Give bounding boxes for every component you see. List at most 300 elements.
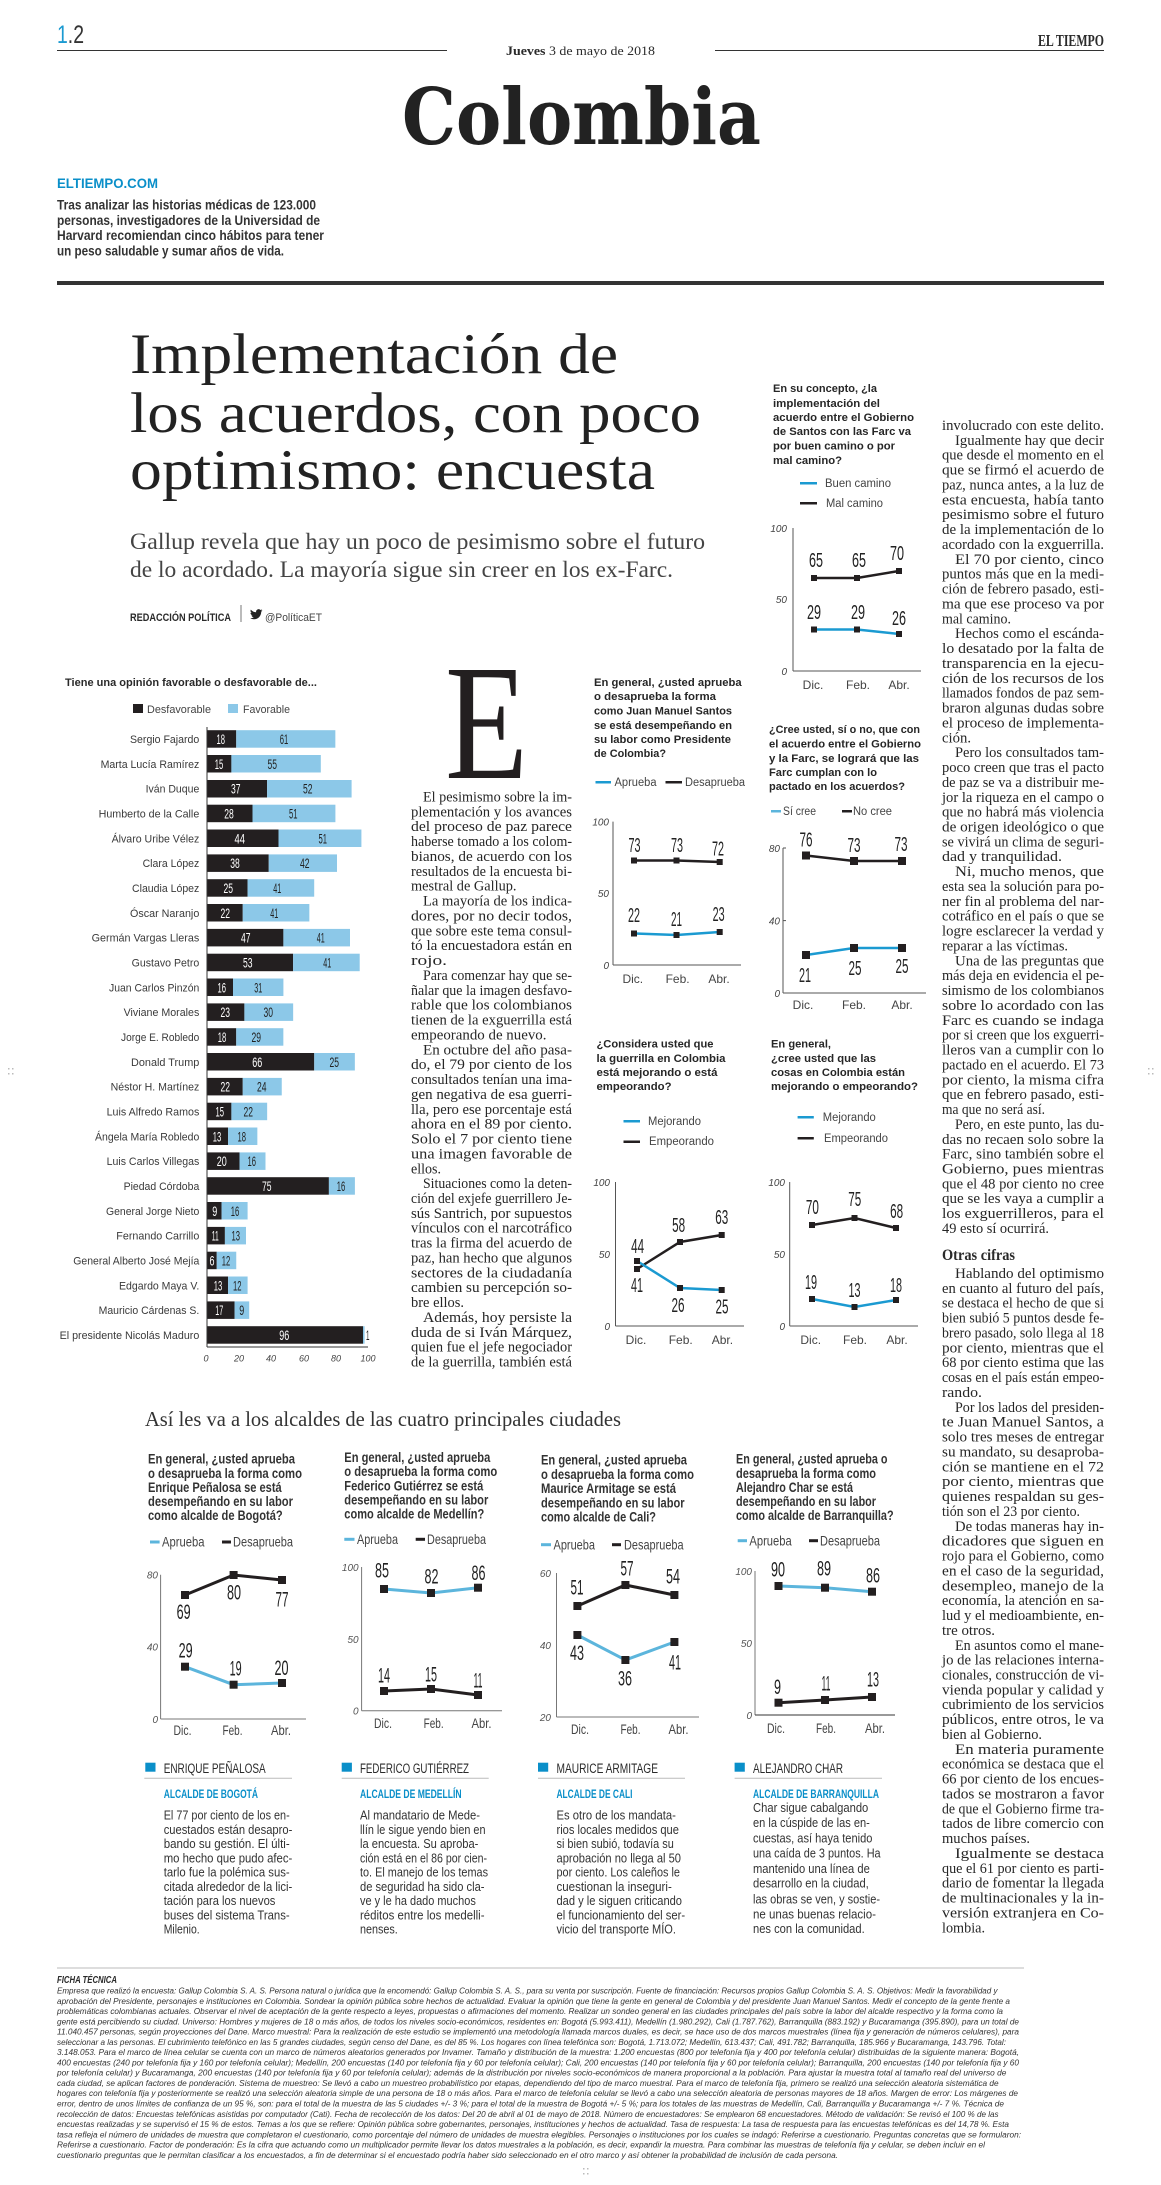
body text: right column: dicadores que siguen en — [942, 1534, 1105, 1550]
masthead: EL TIEMPO: EL TIEMPO — [1038, 31, 1104, 50]
profile: Alejandro Char: ALEJANDRO CHAR — [753, 1761, 843, 1776]
question: mal camino? — [773, 455, 842, 467]
body text: right column: que se les vaya a cumplir a — [942, 1191, 1104, 1207]
body text: right column: jor la riqueza en el campo o — [941, 790, 1104, 806]
data labels: 86 — [472, 1562, 486, 1585]
technical sheet: ficha técnica: problemáticas colombianas actuales. Observar el nivel de aceptación de la gente respecto a leyes, propuestas o afirmaciones del momento. Realizar un sondeo general en las ciudades principales del país sobre la labor del alcalde respectivo y la forma como la — [56, 2006, 1003, 2016]
bar value labels: 66 — [252, 1054, 262, 1070]
bar name labels: Ángela María Robledo — [95, 1130, 199, 1143]
axes: 80 — [147, 1571, 158, 1582]
bar value labels: 18 — [216, 731, 225, 747]
axes: Dic. — [793, 998, 813, 1012]
body text: right column: Igualmente hay que decir — [955, 433, 1104, 449]
bar value labels: 75 — [262, 1178, 272, 1194]
body text: right column: De todas maneras hay in- — [955, 1519, 1104, 1535]
axes: 100 — [768, 1178, 785, 1189]
question: desaprueba la forma como — [736, 1466, 876, 1481]
body text: right column: mal camino. — [942, 611, 1011, 627]
axes: 100 — [592, 818, 609, 829]
main headline — [130, 323, 701, 502]
question: como Juan Manuel Santos — [594, 706, 732, 718]
bar value labels: 41 — [273, 880, 281, 896]
legend — [541, 1536, 684, 1552]
body text: main column: del proceso de paz parece — [411, 819, 572, 835]
legend: Desaprueba — [820, 1532, 880, 1548]
bar value labels: 20 — [217, 1153, 227, 1169]
axes: 0 — [774, 989, 780, 1000]
body text: right column: lombia. — [942, 1920, 985, 1936]
axes: 100 — [735, 1567, 752, 1578]
body text: right column: de paz se va a distribuir me- — [942, 775, 1104, 791]
profile: Maurice Armitage: ALCALDE DE CALI — [556, 1789, 632, 1801]
data labels: 26 — [892, 608, 906, 630]
body text: right column: que el 61 por ciento es parti- — [942, 1861, 1104, 1877]
body text: right column: en cuanto al futuro del país, — [942, 1281, 1104, 1297]
body text: right column: muchos países. — [942, 1831, 1030, 1847]
profile: Alejandro Char: cuestas, así haya tenido — [753, 1831, 872, 1845]
body text: main column: paz, han hecho que algunos — [411, 1250, 572, 1266]
question: de Colombia? — [594, 748, 666, 760]
legend: Aprueba — [162, 1534, 205, 1550]
bar value labels: 53 — [243, 954, 253, 970]
body text: right column: rando. — [942, 1385, 982, 1401]
profile: Federico Gutiérrez: ALCALDE DE MEDELLÍN — [360, 1788, 462, 1801]
question: desempeñando en su labor — [736, 1494, 877, 1509]
byline — [130, 605, 322, 624]
profile: Enrique Peñalosa: citada alrededor de la lici- — [164, 1880, 292, 1894]
body text: right column — [941, 418, 1105, 1936]
data labels: 80 — [227, 1582, 241, 1604]
data labels: 25 — [716, 1296, 728, 1318]
bar value labels: 12 — [222, 1252, 230, 1268]
question: o desaprueba la forma como — [541, 1467, 694, 1482]
question: Enrique Peñalosa se está — [148, 1480, 282, 1495]
question — [541, 1452, 694, 1524]
profile: Federico Gutiérrez: to. El manejo de los temas — [360, 1866, 488, 1880]
question: el acuerdo entre el Gobierno — [769, 738, 921, 750]
axes: 40 — [540, 1641, 551, 1652]
axes: 80 — [769, 844, 780, 855]
question: Federico Gutiérrez se está — [344, 1478, 484, 1493]
deck: Gallup revela que hay un poco de pesimismo sobre el futuro — [130, 529, 705, 554]
body text: right column: Hablando del optimismo — [955, 1266, 1104, 1282]
series lines — [181, 1571, 286, 1689]
question: o desaprueba la forma como — [344, 1464, 497, 1479]
data labels — [628, 835, 725, 931]
body text: right column: Una de las preguntas que — [955, 953, 1104, 969]
body text: right column: cotráfico en el país o que se — [942, 909, 1104, 925]
body text: right column: de multinacionales y la in- — [942, 1890, 1104, 1906]
legend: Mejorando — [823, 1112, 876, 1124]
bar value labels: 17 — [215, 1302, 223, 1318]
question: cosas en Colombia están — [771, 1067, 905, 1079]
axes: Abr. — [668, 1721, 688, 1737]
question — [771, 1038, 918, 1093]
data labels — [807, 543, 906, 630]
profile: Enrique Peñalosa: buses del sistema Trans- — [164, 1908, 290, 1922]
profile: Enrique Peñalosa: bando su gestión. El últi- — [164, 1837, 290, 1851]
series lines — [631, 858, 723, 938]
profile: Maurice Armitage: rios locales medidos que — [556, 1823, 679, 1837]
body text: main column: cambien su percepción so- — [411, 1280, 572, 1296]
data labels: 13 — [867, 1668, 879, 1692]
technical sheet: ficha técnica: hogares con telefonía fija y posteriormente se realizó una selección aleatoria simple de una persona de 18 o más años. Para el marco de telefonía celular se llevó a cabo una selección aleatoria de personas mayores de 18 años. Margen de error: Los márgenes de — [57, 2088, 1018, 2098]
body text: right column: ción de los recursos de los — [942, 671, 1104, 687]
bar chart axes — [203, 727, 376, 1364]
technical sheet: ficha técnica: 400 encuestas (240 por telefonía fija y 160 por telefonía celular); Medellín, 200 encuestas (140 por telefonía fija y 60 por telefonía celular); Cali, 200 encuestas (140 por telefonía fija y 60 por telefonía celular); Barranquilla, 200 encuestas (140 por telefonía fija y 60 — [57, 2057, 1019, 2067]
icon: blue square — [342, 1763, 352, 1772]
technical sheet: ficha técnica: seleccionar a las personas. El cubrimiento telefónico en las 5 grandes ciudades, según censo del Dane, es del 85 %. Los hogares con línea telefónica son: Bogotá, 1.713.072; Medellín, 613.437; Cali, 491.782; Barranquilla, 185.966 y Bucaramanga, 143.796. Total: — [57, 2037, 1007, 2047]
axes — [769, 844, 926, 1012]
axes: Feb. — [424, 1715, 444, 1731]
data labels — [570, 1558, 681, 1690]
bar name labels: Clara López — [143, 858, 199, 870]
profile: Alejandro Char: las obras se ven, y sostie- — [753, 1892, 880, 1906]
bar value labels — [210, 731, 370, 1343]
axes — [735, 1567, 895, 1736]
bar value labels: 61 — [280, 731, 288, 747]
bar chart legend: Favorable — [243, 704, 290, 716]
data labels: 85 — [375, 1560, 389, 1582]
legend: Desaprueba — [624, 1536, 684, 1552]
bar chart axes: 40 — [266, 1354, 276, 1364]
data labels — [375, 1560, 486, 1692]
data labels — [177, 1582, 288, 1680]
body text: right column: se vivirá un clima de seguri- — [942, 834, 1104, 850]
question: empeorando? — [596, 1081, 672, 1093]
technical sheet: ficha técnica: error, dentro de unos límites de confianza de un 95 %, son: para el total de la muestra de las 5 ciudades +/- 3 %; para el total de la muestra de Bogotá +/- 5 %; para los totales de las muestras de Medellín, Cali, Barranquilla y Bucaramanga +/- 7 %. Técnica de — [57, 2098, 1004, 2108]
deck: de lo acordado. La mayoría sigue sin creer en los ex-Farc. — [130, 557, 673, 582]
data labels: 25 — [848, 958, 862, 980]
body text: right column: bien subió 5 puntos desde fe- — [942, 1311, 1104, 1327]
bar name labels: Edgardo Maya V. — [119, 1280, 199, 1292]
bar value labels: 22 — [221, 1079, 230, 1095]
profile: Maurice Armitage: si bien subió, todavía su — [556, 1837, 674, 1851]
data labels: 23 — [713, 904, 725, 926]
technical sheet: ficha técnica: tasa refleja el número de unidades de muestra que completaron el cuestionario, como porcentaje del número de unidades de muestra elegibles. Personajes o instituciones por los cuales se indagó: Referirse a cuestionario. Preguntas concretas que se formularon: — [57, 2129, 1022, 2139]
axes: 0 — [353, 1707, 359, 1718]
legend: No cree — [853, 806, 892, 818]
axes: 40 — [147, 1643, 158, 1654]
body text: main column: Situaciones como la deten- — [423, 1176, 572, 1192]
data labels — [805, 1189, 903, 1302]
body text: right column: más deja en evidencia el pe- — [942, 968, 1104, 984]
axes: Feb. — [222, 1722, 242, 1738]
legend: Desaprueba — [685, 777, 746, 789]
question: está mejorando o está — [596, 1067, 719, 1079]
date: Jueves 3 de mayo de 2018 — [506, 43, 655, 58]
bar name labels: Iván Duque — [146, 784, 199, 796]
body text: right column: 68 por ciento estima que las — [942, 1355, 1104, 1371]
body text: right column: solo tres meses de entregar — [942, 1430, 1104, 1446]
body text: main column: sús Santrich, por supuestos — [411, 1206, 572, 1222]
body text: right column: lo desatado por la falta de — [942, 641, 1104, 657]
technical sheet: ficha técnica: 3.148.053. Para el marco de línea celular se cuenta con un marco de números aleatorios generados por Invamer. Tamaño y distribución de la muestra: 1.200 encuestas (800 por telefonía fija y 400 por telefonía celular) distribuidas de la siguiente manera: Bogotá, — [57, 2047, 1019, 2057]
bar name labels: Claudia López — [132, 883, 199, 895]
data labels: 25 — [896, 956, 908, 978]
data labels: 41 — [631, 1275, 643, 1297]
axes: 40 — [769, 917, 780, 928]
bar value labels: 15 — [215, 756, 223, 772]
data labels: 14 — [378, 1664, 390, 1688]
body text: main column: Para comenzar hay que se- — [423, 968, 572, 984]
bar chart heading: Tiene una opinión favorable o desfavorable de... — [65, 677, 317, 689]
profile: Enrique Peñalosa: tación para los nuevos — [164, 1894, 275, 1908]
body text: right column: que en febrero pasado, esti- — [942, 1087, 1104, 1103]
data labels: 18 — [890, 1275, 902, 1297]
body text: main column: bre ellos. — [411, 1295, 464, 1311]
data labels — [771, 1558, 880, 1699]
data labels: 73 — [848, 835, 860, 857]
profile: Maurice Armitage: cuestionan la inseguri- — [556, 1880, 672, 1894]
bar value labels: 38 — [230, 855, 240, 871]
body text: right column: sobre lo acordado con las — [942, 998, 1104, 1014]
axes — [593, 1178, 744, 1347]
body text: right column: dario de fomentar la llegada — [942, 1876, 1104, 1892]
byline: @PolíticaET — [265, 612, 322, 624]
question: desempeñando en su labor — [148, 1494, 294, 1509]
body text: right column: Gobierno, pues mientras — [942, 1162, 1104, 1178]
body text: right column: Hechos como el escánda- — [955, 626, 1104, 642]
data labels: 86 — [866, 1564, 880, 1588]
bar value labels: 13 — [214, 1277, 222, 1293]
profile: Maurice Armitage: aprobación no llega al 50 — [556, 1851, 681, 1865]
data labels: 43 — [570, 1642, 584, 1665]
bar name labels: General Alberto José Mejía — [73, 1255, 200, 1267]
axes: Dic. — [767, 1720, 785, 1736]
data labels: 63 — [715, 1207, 728, 1229]
bar value labels: 13 — [213, 1128, 221, 1144]
body text: right column: brero pasado, solo llega al 18 — [942, 1326, 1104, 1342]
body text: main column: mestral de Gallup. — [411, 879, 516, 895]
axes: 50 — [347, 1635, 359, 1646]
technical sheet: ficha técnica: Referirse a cuestionario. Factor de ponderación: Es la cifra que actuando como un multiplicador permite llevar los datos muestrales a la población, es decir, expandir la muestra. Para combinar las muestras de telefonía fija y celular, se deben incluir en el — [57, 2140, 986, 2150]
question: ¿cree usted que las — [771, 1053, 876, 1065]
body text: main column: tras la firma del acuerdo de — [411, 1236, 572, 1252]
legend: Aprueba — [357, 1531, 398, 1547]
body text: main column: rable que los colombianos — [411, 998, 572, 1014]
data labels: 36 — [618, 1668, 632, 1690]
body text: main column: do, el 79 por ciento de los — [411, 1057, 572, 1073]
bar value labels: 41 — [323, 954, 331, 970]
body text: right column: simismo de los colombianos — [942, 983, 1104, 999]
question: como alcalde de Barranquilla? — [736, 1508, 894, 1523]
body text: main column: de la guerrilla, también está — [411, 1355, 572, 1371]
body text: main column: rojo. — [411, 953, 447, 969]
bar value labels: 18 — [218, 1029, 226, 1045]
technical sheet: ficha técnica: cuestionario preguntas que le permitan clasificar a los encuestados, a fin de determinar si el encuestado podría haber sido seleccionado en el otro marco y así obtener la probabilidad de inclusión de cada persona. — [57, 2150, 838, 2160]
profile: Alejandro Char: nes con la comunidad. — [753, 1922, 865, 1936]
axes: 50 — [741, 1639, 752, 1650]
bar name labels: Juan Carlos Pinzón — [109, 982, 199, 994]
bar name labels: Mauricio Cárdenas S. — [99, 1305, 199, 1317]
profile: Federico Gutiérrez: Al mandatario de Mede- — [360, 1808, 480, 1822]
data labels: 77 — [276, 1588, 288, 1612]
series lines — [809, 1215, 899, 1310]
axes: 20 — [539, 1713, 551, 1724]
question: o desaprueba la forma como — [148, 1466, 302, 1481]
body text: main column: lla, pero ese porcentaje está — [411, 1102, 572, 1118]
body text: right column: jo de las relaciones interna- — [941, 1653, 1104, 1669]
body text: right column: ma que ese proceso va por — [942, 596, 1104, 612]
bar value labels: 31 — [254, 979, 262, 995]
profile: Enrique Peñalosa: tarlo fue la polémica sus- — [164, 1866, 290, 1880]
data labels: 26 — [672, 1295, 684, 1317]
bar value labels: 96 — [279, 1327, 289, 1343]
body text: right column: das no recaen solo sobre la — [942, 1132, 1104, 1148]
question — [596, 1038, 727, 1093]
body text: main column: quien fue el jefe negociador — [411, 1340, 572, 1356]
body text: right column: su mandato, su desaproba- — [942, 1444, 1104, 1460]
bar value labels: 25 — [224, 880, 233, 896]
profile: Alejandro Char: en la cúspide de las en- — [753, 1816, 870, 1830]
body text: main column: gen negativa de esa guerri- — [411, 1087, 572, 1103]
bar value labels: 30 — [264, 1004, 273, 1020]
axes: 50 — [599, 1250, 610, 1261]
profile: Federico Gutiérrez: llín le sigue yendo bien en — [360, 1823, 486, 1837]
question: implementación del — [773, 398, 880, 410]
technical sheet: ficha técnica: Empresa que realizó la encuesta: Gallup Colombia S. A. S. Persona natural o jurídica que la encomendó: Gallup Colombia S. A. S., para su venta por suscripción. Fuente de financiación: Recursos propios Gallup Colombia S. A. S. Objetivos: Medir la favorabilidad y — [57, 1986, 998, 1996]
body text: right column: bien al Gobierno. — [942, 1727, 1042, 1743]
data labels: 20 — [274, 1657, 288, 1680]
body text: right column: por ciento, mientras que el — [942, 1340, 1104, 1356]
bar name labels: Fernando Carrillo — [116, 1231, 199, 1243]
body text: right column: pactado en el acuerdo. El 73 — [942, 1057, 1104, 1073]
data labels: 29 — [851, 602, 865, 624]
body text: right column: desempleo, manejo de la — [942, 1578, 1104, 1594]
legend — [596, 777, 746, 789]
body text: main column: dores, por no decir todos, — [411, 908, 572, 924]
axes: Feb. — [666, 972, 690, 986]
body text: main column: ción del exjefe guerrillero Je- — [411, 1191, 572, 1207]
bar value labels: 18 — [237, 1128, 246, 1144]
profile: Enrique Peñalosa: ENRIQUE PEÑALOSA — [164, 1761, 266, 1776]
question: de Santos con las Farc va — [773, 426, 912, 438]
axes: 50 — [776, 595, 787, 606]
profile: Maurice Armitage: el funcionamiento del ser- — [556, 1908, 685, 1922]
technical sheet: ficha técnica: 11.040.457 personas, según proyecciones del Dane. Marco muestral: Para la realización de este estudio se implementó una metodología llamada marcos duales, es decir, se hace uso de dos marcos muestrales (línea fija y generación de números celulares), para — [57, 2027, 1019, 2037]
legend: Aprueba — [749, 1532, 792, 1548]
main headline: Implementación de — [130, 323, 618, 386]
body text: right column: que desde el momento en el — [942, 448, 1104, 464]
profile: Alejandro Char: Char sigue cabalgando — [753, 1801, 868, 1815]
section title: Colombia: Colombia — [402, 72, 761, 163]
bar name labels: Luis Carlos Villegas — [107, 1156, 200, 1168]
profile: Maurice Armitage: Es otro de los mandata- — [556, 1808, 676, 1822]
panel: line chart, Juan Manuel Santos approval — [592, 677, 746, 986]
panel: Medellín mayor chart — [342, 1450, 502, 1731]
bar value labels: 52 — [303, 781, 313, 797]
bar value labels: 23 — [221, 1004, 230, 1020]
body text: right column: pesimismo sobre el futuro — [942, 507, 1104, 523]
question — [769, 724, 921, 793]
body text: right column: involucrado con este delito. — [942, 418, 1104, 434]
axes: 0 — [781, 667, 787, 678]
body text: right column: lud y el medioambiente, en- — [942, 1608, 1104, 1624]
body text: right column: 66 por ciento de los encues- — [942, 1772, 1104, 1788]
data labels: 89 — [817, 1558, 831, 1580]
data labels: 15 — [425, 1664, 437, 1686]
profile: Enrique Peñalosa — [144, 1761, 292, 1936]
icon: blue square — [735, 1763, 745, 1772]
body text: main column: sectores de la ciudadanía — [411, 1265, 572, 1281]
question — [773, 383, 914, 467]
axes: 0 — [604, 1322, 610, 1333]
body text: right column: por ciento, mientras que — [942, 1474, 1104, 1490]
technical sheet: ficha técnica: cada ciudad, se aplican factores de ponderación. Sistema de muestreo: Se llevó a cabo un muestreo probabilístico por etapas, dependiendo del tipo de marco muestral. Para el marco de telefonía fija, primero se realizó una selección aleatoria sistemática de — [57, 2078, 999, 2088]
panel: line chart, will Farc comply — [769, 724, 926, 1012]
data labels: 21 — [671, 909, 682, 931]
body text: right column: Pero, en este punto, las du- — [955, 1117, 1104, 1133]
question: En general, ¿usted aprueba — [541, 1452, 687, 1468]
data labels: 19 — [805, 1272, 817, 1294]
data labels: 73 — [671, 835, 683, 857]
bar chart axes: 80 — [331, 1354, 341, 1364]
profile: Alejandro Char: ne unas buenas relacio- — [753, 1907, 876, 1921]
question: como alcalde de Cali? — [541, 1509, 656, 1524]
axes: 50 — [774, 1250, 785, 1261]
deck — [130, 529, 705, 582]
data labels: 90 — [771, 1558, 785, 1582]
body text: right column: Ni, mucho menos, que — [955, 864, 1104, 880]
bar chart axes: 0 — [203, 1354, 209, 1364]
data labels: 75 — [848, 1189, 861, 1211]
axes — [770, 524, 921, 692]
axes — [539, 1569, 699, 1737]
bar value labels: 44 — [234, 830, 245, 846]
panel: line chart, guerrilla improving or worsening — [593, 1038, 744, 1347]
profile: Enrique Peñalosa: cuestados están desapro- — [164, 1823, 292, 1837]
question — [148, 1452, 302, 1523]
profile: Enrique Peñalosa: ALCALDE DE BOGOTÁ — [164, 1788, 258, 1801]
axes: Abr. — [888, 678, 910, 692]
body text: right column: Igualmente se destaca — [955, 1846, 1104, 1862]
body text: main column: Solo el 7 por ciento tiene — [411, 1132, 572, 1148]
axes: Dic. — [803, 678, 823, 692]
legend: Desaprueba — [233, 1534, 293, 1550]
body text: right column: que se firmó el acuerdo de — [942, 463, 1104, 479]
body text: right column: puntos más que en la medi- — [942, 567, 1104, 583]
body text: main column: vínculos con el narcotráfico — [411, 1221, 572, 1237]
bar name labels: Óscar Naranjo — [130, 907, 199, 920]
question: se está desempeñando en — [594, 720, 732, 732]
body text: main column: una imagen favorable de — [411, 1146, 572, 1162]
axes: 0 — [603, 961, 609, 972]
bar value labels: 6 — [210, 1252, 215, 1268]
body text: right column: que no habrá más violencia — [942, 805, 1104, 821]
body text: right column: esta sea la solución para po- — [942, 879, 1104, 895]
profile: Alejandro Char — [735, 1761, 882, 1936]
technical sheet: ficha técnica — [56, 1973, 1022, 2160]
panel: Cali mayor chart — [539, 1452, 699, 1737]
icon: blue square — [538, 1763, 548, 1772]
bar value labels: 11 — [212, 1228, 219, 1244]
body text: main column: ñalar que la imagen desfavo- — [411, 983, 572, 999]
profile: Federico Gutiérrez: FEDERICO GUTIÉRREZ — [360, 1761, 469, 1776]
axes: Abr. — [271, 1722, 291, 1738]
profile: Maurice Armitage: por ciento. Los caleños le — [556, 1866, 680, 1880]
body text: right column: económica se destaca que el — [942, 1757, 1104, 1773]
body text: right column: dad y tranquilidad. — [942, 849, 1062, 865]
data labels: 69 — [177, 1601, 191, 1624]
body text: main column: duda de si Iván Márquez, — [411, 1325, 572, 1341]
legend: Empeorando — [649, 1136, 714, 1148]
axes: Feb. — [669, 1333, 693, 1347]
teaser: eltiempo.com: un peso saludable y sumar años de vida. — [57, 244, 284, 258]
legend — [738, 1532, 880, 1548]
series lines — [802, 852, 906, 959]
axes — [592, 818, 741, 986]
